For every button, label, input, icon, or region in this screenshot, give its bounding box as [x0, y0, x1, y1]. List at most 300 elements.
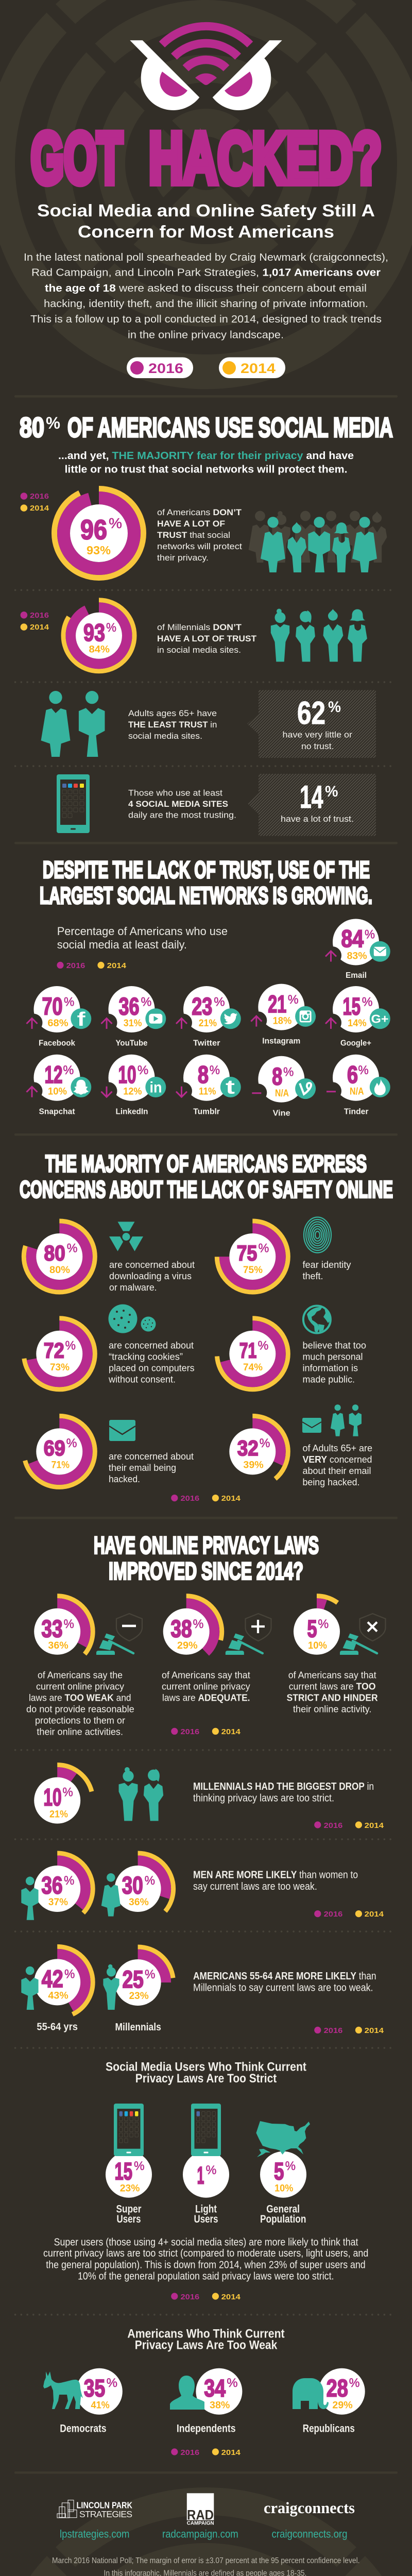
stat: Tumblr: %: [210, 1063, 220, 1077]
icon: tablet with 4 social sites: [57, 774, 90, 833]
text: too weak: protections to them or: [35, 1715, 125, 1726]
stat: light users: Light: [195, 2203, 217, 2215]
stat: Facebook: f: [77, 1009, 85, 1030]
logo: Lincoln Park Strategies: LINCOLN PARK: [76, 2500, 132, 2511]
title: GOT: [31, 117, 123, 198]
donut: 93% of Millennials: [63, 600, 134, 671]
logo: Rad Campaign: RAD: [187, 2507, 214, 2522]
stat: YouTube: %: [141, 995, 151, 1009]
stat: Vine: [249, 1056, 316, 1117]
text: adults 65+: THE LEAST TRUST in: [128, 720, 217, 730]
callout: 14%: [247, 774, 376, 836]
donut: millennials 25%: [102, 1947, 174, 2018]
stat: Republicans: %: [349, 2376, 360, 2390]
links: [60, 2529, 347, 2540]
legend: millennials: 2014: [365, 1821, 384, 1830]
stat: Twitter: [174, 986, 241, 1048]
text: tracking cookies: placed on computers: [109, 1362, 195, 1374]
stat: Democrats: 35: [84, 2375, 105, 2402]
donut: 33% too weak: 36%: [48, 1640, 68, 1651]
stat: YouTube: 31%: [124, 1018, 142, 1029]
stat: Twitter: Twitter: [193, 1039, 220, 1048]
text: adequate: of Americans say that: [162, 1670, 250, 1681]
text: tracking cookies: “tracking cookies”: [109, 1351, 183, 1362]
stat: Instagram: 18%: [273, 1016, 291, 1027]
callout: 14%: 14: [300, 779, 323, 815]
people group: Americans: [249, 511, 387, 572]
donut: 71% personal information: 71: [239, 1338, 256, 1362]
stat: light users: [183, 2104, 229, 2225]
text: too weak: their online activities.: [37, 1726, 123, 1737]
text: virus: or malware.: [109, 1282, 157, 1293]
legend: men: 2014: [365, 1910, 384, 1919]
stat: LinkedIn: [99, 1055, 166, 1116]
paragraph: super users: current privacy laws are too strict (compared to moderate users, light users, and: [43, 2248, 368, 2259]
text: 4 social media sites: Those who use at least: [128, 788, 222, 798]
heading: majority express concerns: [20, 1150, 393, 1202]
logo: Rad Campaign: CAMPAIGN: [187, 2520, 214, 2527]
icon: fingerprint: [304, 1217, 331, 1253]
stat: Google+: G+: [371, 1012, 388, 1025]
logo: Lincoln Park Strategies: STRATEGIES: [79, 2509, 132, 2519]
donut: 10% millennials: [22, 1765, 93, 1836]
paragraph: super users: the general population). This is down from 2014, when 23% of super users and: [46, 2259, 366, 2270]
text: percentage of Americans: [57, 925, 228, 951]
subheading: too strict: Social Media Users Who Think Current: [106, 2060, 306, 2074]
donut: 33% too weak: [22, 1596, 93, 1667]
text: tracking cookies: are concerned about: [109, 1340, 194, 1350]
legend: concerns: 2014: [221, 1494, 241, 1503]
text: 4 social media sites: [128, 788, 236, 820]
icon: envelope: [109, 1420, 135, 1441]
text: Millennials trust: of Millennials DON’T: [157, 622, 242, 632]
donut: 5% too strict: %: [318, 1617, 329, 1631]
legend: too strict: [171, 2293, 241, 2301]
title: [31, 117, 382, 198]
donut: 72% tracking cookies: [24, 1318, 95, 1389]
stat: Instagram: Instagram: [262, 1037, 300, 1046]
legend: men: [314, 1910, 384, 1919]
icon: millennials pair: [119, 1767, 163, 1821]
text: too much public information: much personal: [303, 1351, 363, 1362]
stat: Republicans: Republicans: [303, 2423, 355, 2435]
people group: Millennials: [271, 609, 367, 662]
donut: 72% tracking cookies: 73%: [50, 1362, 70, 1373]
text: Americans 55-64: AMERICANS 55-64 ARE MORE LIKELY than: [193, 1971, 376, 1982]
text: millennials drop: MILLENNIALS HAD THE BIGGEST DROP in: [193, 1781, 374, 1792]
text: too much public information: information is: [303, 1362, 358, 1374]
legend: millennials: [314, 1821, 384, 1830]
donut: 10% millennials: 21%: [49, 1809, 68, 1820]
subheading: too strict: [106, 2060, 306, 2086]
donut: 69% email hacked: 69: [44, 1436, 65, 1460]
text: Americans trust: networks will protect: [157, 541, 242, 551]
stat: Independents: %: [227, 2376, 238, 2390]
subheading: fear for privacy: [58, 450, 354, 475]
text: men more likely: [193, 1869, 358, 1892]
icon: shield x and gavel: [340, 1614, 385, 1655]
heading: despite the lack of trust: [40, 856, 372, 909]
stat: super users: 23%: [120, 2183, 140, 2194]
donut: 32% adults 65+: %: [260, 1436, 270, 1450]
donut: men 36%: 37%: [48, 1897, 68, 1908]
text: adequate: [162, 1670, 250, 1703]
links: lpstrategies.com: [60, 2529, 130, 2540]
stat: Google+: %: [362, 995, 373, 1009]
donut: 55-64 yrs 42%: 43%: [48, 1990, 68, 2001]
donut: 93% of Millennials: 84%: [89, 644, 110, 655]
stat: Snapchat: 10%: [48, 1087, 67, 1097]
stat: Tinder: Tinder: [344, 1107, 368, 1116]
stat: Independents: [170, 2368, 242, 2435]
stat: Tinder: 6: [347, 1061, 358, 1088]
donut: 10% millennials: %: [62, 1786, 73, 1800]
legend: privacy laws: [171, 1727, 241, 1736]
background pattern: bottom target rings: [10, 2487, 402, 2576]
donut: 55-64 yrs 42%: %: [64, 1967, 75, 1981]
donut: 69% email hacked: %: [66, 1436, 77, 1450]
donut: women 30%: 30: [122, 1872, 143, 1899]
icon: cookies: [108, 1304, 156, 1333]
stat: Democrats: %: [107, 2376, 117, 2390]
donut: 75% identity theft: 75: [237, 1241, 257, 1265]
heading: online privacy laws: IMPROVED SINCE 2014?: [109, 1557, 303, 1585]
donut: 10% millennials: 10: [43, 1783, 62, 1810]
legend: 96% donut: 2014: [30, 504, 49, 513]
text: too weak: of Americans say the: [38, 1670, 123, 1681]
stat: general population: [256, 2121, 310, 2225]
stat: LinkedIn: 10: [118, 1061, 136, 1088]
donut: men 36%: %: [64, 1874, 74, 1888]
text: Millennials trust: [157, 622, 257, 655]
footnotes: March 2016 National Poll; The margin of error is ±3.07 percent at the 95 percent confidence level.: [52, 2556, 359, 2565]
legend: social use: [57, 961, 127, 970]
text: identity theft: [303, 1259, 351, 1281]
donut: 32% adults 65+: 32: [237, 1436, 259, 1460]
paragraph: super users: 10% of the general population said privacy laws were too strict.: [78, 2270, 334, 2282]
stat: super users: 15: [114, 2158, 132, 2185]
stat: Tinder: %: [358, 1063, 369, 1077]
icon: phone super user: [114, 2104, 144, 2156]
text: adequate: laws are ADEQUATE.: [162, 1692, 250, 1703]
donut: 80% virus: %: [67, 1242, 78, 1255]
stat: LinkedIn: 12%: [123, 1087, 142, 1097]
stat: Facebook: [25, 986, 91, 1048]
stat: general population: 10%: [274, 2183, 293, 2194]
stat: Twitter: 21%: [199, 1018, 217, 1029]
text: adults email: being hacked.: [303, 1477, 359, 1487]
text: too weak: current online privacy: [36, 1681, 125, 1692]
callout: 62%: no trust.: [301, 741, 334, 751]
text: Americans trust: their privacy.: [157, 553, 209, 563]
text: too much public information: believe that too: [303, 1340, 366, 1350]
text: too much public information: [303, 1340, 366, 1385]
legend: too weak: [171, 2448, 241, 2457]
donut: 38% adequate: 38: [170, 1615, 192, 1642]
icon: donkey: [43, 2371, 83, 2409]
text: email hacked: [109, 1451, 194, 1484]
stat: Facebook: 70: [42, 992, 63, 1020]
stat: YouTube: 36: [118, 992, 139, 1020]
logo: craigconnects: craigconnects: [264, 2499, 355, 2517]
donut: 80% virus: [24, 1221, 95, 1292]
stat: super users: Users: [116, 2213, 141, 2225]
text: Americans trust: HAVE A LOT OF: [157, 519, 225, 529]
stat: light users: %: [206, 2163, 216, 2177]
donut: 80% virus: 80%: [49, 1265, 70, 1276]
stat: light users: Users: [194, 2213, 218, 2225]
text: men more likely: say current laws are too weak.: [193, 1881, 317, 1892]
stat: Google+: 14%: [348, 1018, 367, 1029]
stat: general population: General: [266, 2203, 300, 2215]
stat: LinkedIn: LinkedIn: [115, 1107, 148, 1116]
subheading: too weak: Privacy Laws Are Too Weak: [135, 2338, 278, 2352]
stat: Independents: 34: [204, 2375, 226, 2402]
text: Americans trust: [157, 507, 242, 563]
stat: Tinder: [323, 1055, 390, 1116]
legend: social use: 2014: [107, 961, 127, 970]
donut: 72% tracking cookies: %: [65, 1338, 76, 1352]
icon: adults woman and man: [41, 691, 105, 757]
donut: 96% of Americans: %: [109, 515, 122, 531]
text: millennials drop: [193, 1781, 374, 1804]
paragraph: super users: [43, 2236, 368, 2282]
stat: general population: 5: [274, 2158, 284, 2185]
donut: 55-64 yrs 42%: [21, 1946, 93, 2018]
subheading: fear for privacy: little or no trust that social networks will protect them.: [65, 464, 347, 475]
text: virus: downloading a virus: [109, 1270, 192, 1281]
donut: 96% of Americans: 96: [80, 514, 107, 545]
donut: 55-64 yrs 42%: 42: [42, 1965, 63, 1992]
text: too weak: do not provide reasonable: [26, 1704, 134, 1715]
donut: 69% email hacked: 71%: [52, 1460, 70, 1470]
icon: phone light user: [191, 2104, 221, 2156]
donut: 33% too weak: %: [63, 1617, 74, 1631]
logo: Rad Campaign: [187, 2493, 214, 2527]
callout: 62%: have very little or: [282, 730, 352, 739]
callout: 62%: [247, 690, 376, 758]
stat: Email: 84: [341, 925, 364, 952]
intro paragraph: [24, 252, 388, 341]
stat: Google+: 15: [343, 992, 360, 1020]
subtitle: [37, 201, 375, 241]
intro paragraph: This is a follow up to a poll conducted in 2014, designed to track trends: [30, 314, 382, 325]
donut: 69% email hacked: [24, 1416, 95, 1487]
legend: men: 2016: [324, 1910, 342, 1919]
stat: YouTube: YouTube: [115, 1039, 148, 1048]
legend: too weak: 2014: [221, 2448, 241, 2457]
legend: 96% donut: 2016: [30, 492, 49, 501]
donut: 80% virus: 80: [44, 1241, 65, 1265]
intro paragraph: Rad Campaign, and Lincoln Park Strategies, 1,017 Americans over: [31, 267, 381, 278]
text: too strict: current laws are TOO: [289, 1681, 376, 1692]
text: email hacked: are concerned about: [109, 1451, 194, 1462]
legend: concerns: 2016: [180, 1494, 199, 1503]
donut: 32% adults 65+: [217, 1416, 288, 1487]
text: tracking cookies: [108, 1340, 195, 1385]
logo: Lincoln Park Strategies: [57, 2500, 132, 2519]
subtitle: Social Media and Online Safety Still A: [37, 201, 375, 220]
stat: Vine: %: [283, 1065, 294, 1079]
stat: Tinder: N/A: [350, 1087, 364, 1097]
donut: millennials 25%: 23%: [129, 1991, 149, 2002]
stat: Facebook: %: [64, 995, 74, 1009]
text: millennials drop: thinking privacy laws are too strict.: [193, 1793, 334, 1804]
text: too strict: their online activity.: [293, 1704, 371, 1715]
donut: women 30%: 36%: [129, 1897, 149, 1908]
legend: age groups: 2016: [324, 2026, 342, 2035]
text: adults 65+: [128, 708, 217, 741]
donut: men 36%: 36: [41, 1872, 63, 1899]
labels: age groups: Millennials: [115, 2022, 161, 2033]
icon: globe: [303, 1306, 331, 1333]
text: too strict: of Americans say that: [288, 1670, 376, 1681]
donut: 38% adequate: 29%: [177, 1640, 198, 1651]
donut: 93% of Millennials: 93: [83, 619, 105, 646]
stat: super users: %: [134, 2159, 145, 2173]
text: too weak: [26, 1670, 134, 1737]
stat: general population: %: [285, 2159, 296, 2173]
stat: Email: [323, 919, 390, 980]
text: identity theft: theft.: [303, 1270, 323, 1281]
subheading: too weak: Americans Who Think Current: [127, 2327, 285, 2341]
stat: Tumblr: 8: [198, 1061, 209, 1088]
legend: age groups: 2014: [365, 2026, 384, 2035]
subheading: too strict: Privacy Laws Are Too Strict: [135, 2072, 277, 2086]
stat: super users: [106, 2104, 152, 2225]
legend: privacy laws: 2016: [180, 1727, 199, 1736]
text: adults email: of Adults 65+ are: [303, 1443, 372, 1453]
stat: Tumblr: [174, 1055, 241, 1116]
heading: 80% of Americans use social media: 80: [20, 412, 44, 443]
text: virus: are concerned about: [109, 1259, 195, 1270]
stat: super users: Super: [116, 2203, 141, 2215]
text: email hacked: their email being: [109, 1462, 176, 1473]
icon: shield minus and gavel: [96, 1614, 142, 1655]
stat: Democrats: Democrats: [60, 2423, 107, 2435]
text: Millennials trust: HAVE A LOT OF TRUST: [157, 634, 257, 643]
intro paragraph: hacking, identity theft, and the illicit sharing of private information.: [44, 298, 368, 310]
stat: Twitter: %: [214, 995, 225, 1009]
legend: too weak: 2016: [180, 2448, 199, 2457]
stat: Google+: Google+: [340, 1039, 371, 1048]
stat: LinkedIn: in: [149, 1079, 162, 1096]
donut: 96% of Americans: [55, 488, 143, 578]
legend pills: 2016 and 2014: 2016: [148, 361, 183, 376]
callout: 14%: have a lot of trust.: [281, 814, 354, 824]
stat: Democrats: 41%: [91, 2400, 110, 2411]
subheading: fear for privacy: ...and yet, THE MAJORITY fear for their privacy and have: [58, 450, 354, 462]
stat: Email: Email: [346, 971, 367, 980]
legend pills: 2016 and 2014: [127, 358, 285, 378]
legend: privacy laws: 2014: [221, 1727, 241, 1736]
stat: Tumblr: t: [226, 1077, 235, 1098]
text: adults 65+: social media sites.: [128, 731, 202, 741]
donut: 38% adequate: %: [193, 1617, 203, 1631]
text: email hacked: hacked.: [109, 1473, 140, 1484]
legend: social use: 2016: [66, 961, 85, 970]
text: men more likely: MEN ARE MORE LIKELY than women to: [193, 1869, 358, 1880]
stat: Independents: Independents: [177, 2423, 236, 2435]
donut: 5% too strict: [281, 1596, 352, 1667]
labels: age groups: 55-64 yrs: [37, 2021, 78, 2032]
stat: general population: Population: [260, 2213, 306, 2225]
stat: Facebook: Facebook: [39, 1039, 75, 1048]
text: adults email: [303, 1443, 372, 1487]
text: Millennials trust: in social media sites.: [157, 645, 241, 655]
text: too much public information: made public.: [303, 1374, 355, 1385]
legend: 93% donut: [21, 611, 49, 632]
donut: 71% personal information: [217, 1318, 288, 1389]
stat: Republicans: [293, 2368, 365, 2435]
stat: YouTube: [99, 986, 166, 1048]
stat: Vine: 8: [272, 1062, 282, 1090]
donut: 72% tracking cookies: 72: [44, 1338, 64, 1362]
icon: envelope and adults: [302, 1404, 362, 1436]
donut: 71% personal information: %: [258, 1338, 268, 1352]
icon: US map: [256, 2121, 310, 2157]
donut: 75% identity theft: [217, 1221, 288, 1292]
background pattern: top target rings: [0, 0, 412, 389]
text: identity theft: fear identity: [303, 1259, 351, 1270]
subheading: too weak: [127, 2327, 285, 2352]
donut: 75% identity theft: 75%: [243, 1265, 263, 1276]
text: tracking cookies: without consent.: [108, 1374, 176, 1385]
donut: 93% of Millennials: %: [106, 621, 116, 635]
legend: too strict: 2014: [221, 2293, 241, 2301]
intro paragraph: In the latest national poll spearheaded by Craig Newmark (craigconnects),: [24, 252, 388, 263]
links: craigconnects.org: [272, 2529, 347, 2540]
donut: men 36%: [21, 1853, 93, 1924]
legend: 96% donut: [21, 492, 49, 513]
stat: light users: 1: [197, 2161, 204, 2189]
donut: 32% adults 65+: 39%: [243, 1460, 264, 1470]
icon: elephant: [293, 2378, 329, 2409]
stat: Vine: N/A: [275, 1088, 289, 1099]
stat: Snapchat: [25, 1055, 91, 1116]
text: Americans 55-64: Millennials to say current laws are too weak.: [193, 1982, 373, 1993]
legend: too strict: 2016: [180, 2293, 199, 2301]
stat: Email: 83%: [347, 951, 367, 961]
callout: 14%: %: [325, 783, 338, 800]
stat: Independents: 38%: [210, 2400, 230, 2411]
legend: millennials: 2016: [324, 1821, 342, 1830]
text: 4 social media sites: daily are the most trusting.: [128, 810, 236, 820]
legend: age groups: [314, 2026, 384, 2035]
stat: Snapchat: Snapchat: [39, 1107, 75, 1116]
stat: Republicans: 29%: [332, 2400, 353, 2411]
donut: millennials 25%: 25: [123, 1965, 144, 1993]
heading: 80% of Americans use social media: %: [46, 414, 60, 432]
subtitle: Concern for Most Americans: [78, 222, 334, 241]
paragraph: super users: Super users (those using 4+ social media sites) are more likely to think that: [54, 2236, 358, 2248]
callout: 62%: 62: [297, 696, 325, 731]
stat: Tumblr: 11%: [199, 1087, 216, 1097]
text: percentage of Americans: Percentage of Americans who use: [57, 925, 228, 938]
text: adults 65+: Adults ages 65+ have: [128, 708, 217, 718]
legend pills: 2016 and 2014: 2014: [241, 361, 276, 376]
text: 4 social media sites: 4 SOCIAL MEDIA SITES: [128, 799, 228, 809]
text: adequate: current online privacy: [162, 1681, 250, 1692]
stat: Facebook: 68%: [47, 1018, 68, 1029]
legend: 93% donut: 2016: [30, 611, 49, 620]
stat: LinkedIn: %: [138, 1063, 148, 1077]
stat: Google+: [323, 986, 390, 1048]
donut: 71% personal information: 74%: [243, 1362, 263, 1373]
stat: Twitter: 23: [192, 992, 212, 1020]
legend: concerns: [171, 1494, 241, 1503]
text: too strict: STRICT AND HINDER: [287, 1692, 378, 1703]
